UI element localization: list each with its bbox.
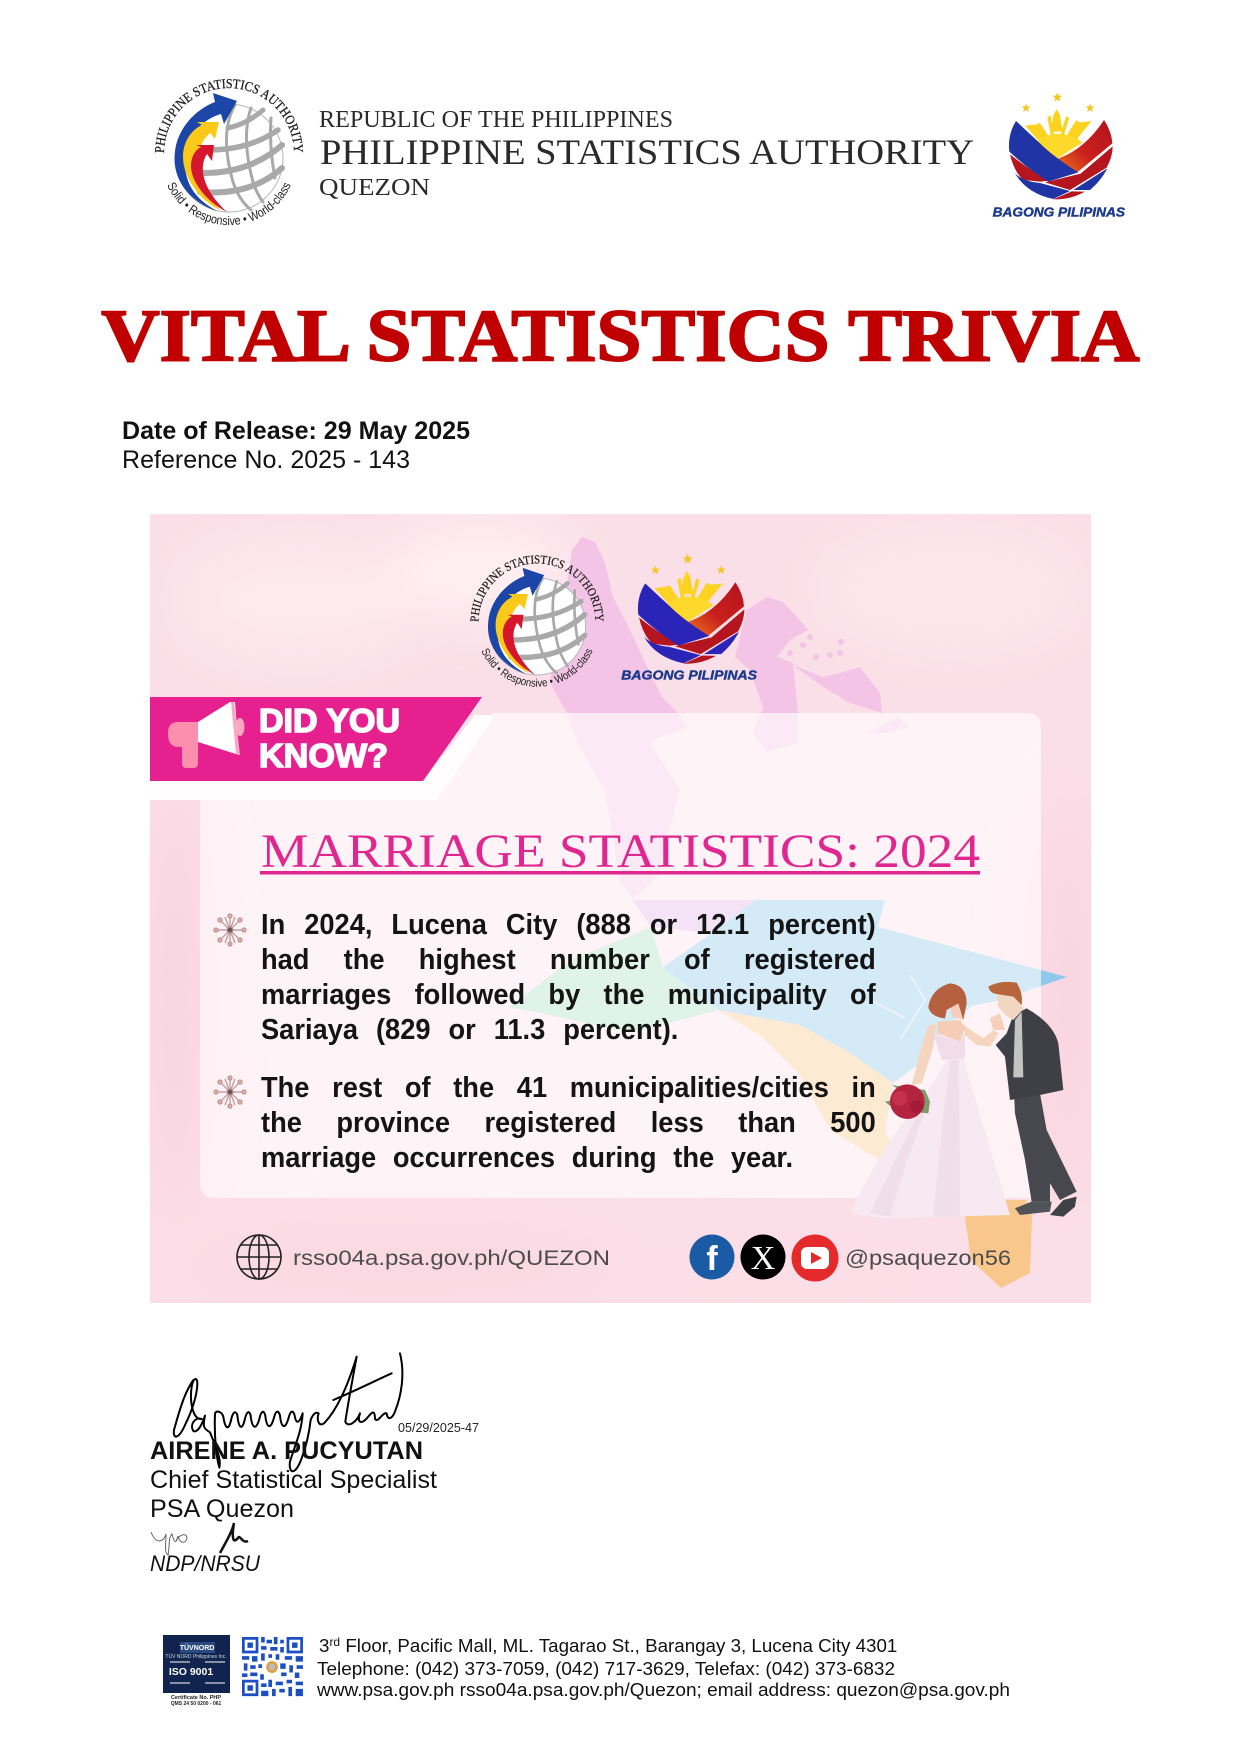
logo: Bagong Pilipinas on poster: BAGONG PILIPINAS (621, 667, 757, 682)
icon: facebook: f (706, 1240, 718, 1278)
text block: rest of municipalities: the province registered less than 500 (261, 1107, 876, 1139)
logo: Bagong Pilipinas (993, 92, 1126, 219)
footer address: Telephone: (042) 373-7059, (042) 717-3629, Telefax: (042) 373-6832 (317, 1658, 895, 1679)
badge: ISO 9001: Certificate No. PHP (171, 1695, 221, 1701)
signature timestamp: 05/29/2025-47 (398, 1421, 479, 1435)
logo: PSA seal on poster: Solid • Responsive • World-class (482, 648, 592, 687)
banner ribbon: white backing (150, 715, 495, 800)
heading: agency name (319, 107, 974, 201)
text block: Lucena City and Sariaya: Sariaya (829 or 11.3 percent). (261, 1014, 678, 1046)
heading: agency name: REPUBLIC OF THE PHILIPPINES (319, 107, 673, 133)
text block: rest of municipalities: The rest of the 41 municipalities/cities in (261, 1072, 876, 1104)
icon: YouTube (792, 1234, 838, 1282)
banner: did you know (150, 697, 482, 781)
badge: ISO 9001: QMS 24 50 0200 - 061 (171, 1701, 222, 1707)
heading: agency name: QUEZON (319, 175, 430, 201)
badge: ISO 9001: TÜV NORD Philippines Inc. (165, 1653, 227, 1660)
text block: rest of municipalities: marriage occurrences during the year. (261, 1142, 793, 1174)
signatory title: Chief Statistical Specialist (150, 1466, 437, 1494)
signatory office: PSA Quezon (150, 1495, 294, 1523)
signature (174, 1353, 402, 1471)
initials caption: NDP/NRSU (150, 1551, 260, 1576)
footer address: rd (329, 1635, 340, 1649)
icon: bullet flower 1 (214, 914, 246, 946)
card: content panel (200, 713, 1041, 1198)
text block: Lucena City and Sariaya: In 2024, Lucena City (888 or 12.1 percent) (261, 909, 876, 941)
logo: Philippine Statistics Authority seal: Solid • Responsive • World-class (168, 182, 290, 225)
text block: Lucena City and Sariaya: had the highest number of registered (261, 944, 876, 976)
text block: Lucena City and Sariaya: marriages followed by the municipality of (261, 979, 876, 1011)
logo: Bagong Pilipinas on poster (621, 554, 757, 682)
footer address: Floor, Pacific Mall, ML. Tagarao St., Barangay 3, Lucena City 4301 (340, 1635, 897, 1656)
illustration: bride and groom (850, 982, 1077, 1218)
panel: did you know poster (150, 514, 1091, 1303)
footer address (316, 1635, 1010, 1700)
badge: ISO 9001: ISO 9001 (169, 1666, 213, 1678)
icon: bullet flower 2 (214, 1076, 246, 1108)
initials signature 2 (220, 1523, 248, 1553)
badge: ISO 9001 (163, 1635, 230, 1707)
logo: PSA seal on poster (470, 555, 604, 687)
icon: megaphone (168, 702, 244, 768)
logo: Philippine Statistics Authority seal: PHILIPPINE STATISTICS AUTHORITY (154, 78, 304, 153)
heading: agency name: PHILIPPINE STATISTICS AUTHORITY (320, 132, 974, 172)
reference number: Reference No. 2025 - 143 (122, 446, 410, 474)
footer address: www.psa.gov.ph rsso04a.psa.gov.ph/Quezon; email address: quezon@psa.gov.ph (316, 1679, 1010, 1700)
footer address: 3 (319, 1635, 329, 1656)
icon: X (740, 1234, 786, 1280)
text block: rest of municipalities (261, 1072, 876, 1174)
logo: Philippine Statistics Authority seal (154, 78, 304, 225)
logo: Bagong Pilipinas: BAGONG PILIPINAS (993, 205, 1126, 219)
banner text: KNOW? (259, 738, 388, 775)
initials signature 1 (151, 1532, 187, 1555)
banner text (260, 708, 399, 768)
QR code (242, 1637, 303, 1696)
release date: Date of Release: 29 May 2025 (122, 417, 470, 445)
logo: PSA seal on poster: PHILIPPINE STATISTICS AUTHORITY (470, 555, 604, 622)
website url: rsso04a.psa.gov.ph/QUEZON (293, 1247, 610, 1270)
text block: Lucena City and Sariaya (261, 909, 876, 1046)
icon: globe (237, 1235, 281, 1279)
icon: X: X (751, 1240, 775, 1277)
poster heading: marriage statistics: MARRIAGE STATISTICS: 2024 (261, 825, 980, 878)
social handle: @psaquezon56 (845, 1247, 1011, 1270)
map: Quezon province (509, 537, 1067, 1288)
signatory name: AIRENE A. PUCYUTAN (150, 1437, 423, 1465)
badge: ISO 9001: TÜVNORD (180, 1643, 214, 1652)
icon: facebook (690, 1234, 734, 1280)
poster heading: marriage statistics (260, 835, 980, 874)
banner text: DID YOU (259, 703, 400, 740)
